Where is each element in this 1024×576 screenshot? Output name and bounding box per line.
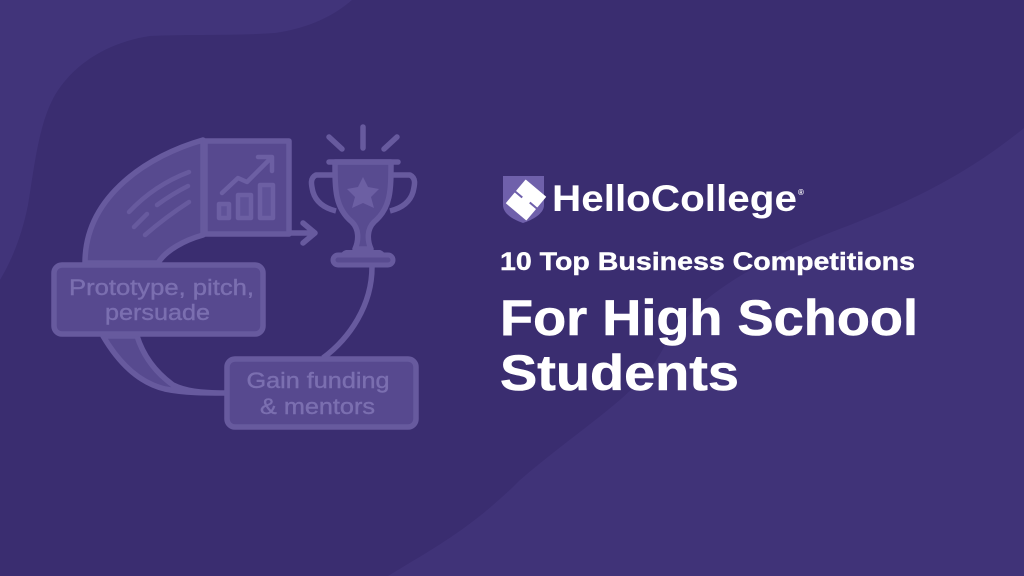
star	[347, 177, 379, 208]
callout: prototype	[54, 265, 263, 334]
growth arrow	[222, 157, 272, 193]
subtitle: 10 Top Business Competitions	[500, 248, 915, 276]
title	[500, 290, 918, 401]
callout: prototype: Prototype, pitch,	[69, 275, 254, 300]
logo: HelloCollege: ®	[798, 188, 804, 197]
title: For High School	[500, 290, 918, 346]
illustration: competition journey	[54, 127, 416, 427]
base	[333, 250, 393, 265]
slide notes	[129, 172, 189, 235]
ribbon path	[85, 140, 225, 393]
callout: prototype: persuade	[105, 300, 210, 325]
callout: funding: Gain funding	[246, 368, 390, 393]
icon: shield	[503, 176, 546, 223]
bars	[219, 185, 273, 218]
callout: funding	[227, 359, 416, 427]
arrow to trophy	[289, 223, 315, 243]
callout: funding: & mentors	[260, 394, 375, 419]
icon: trophy	[311, 127, 415, 265]
connecting line	[323, 267, 372, 358]
wordmark: HelloCollege	[552, 178, 797, 219]
cup	[335, 162, 391, 249]
handles	[311, 175, 415, 211]
sparks	[329, 127, 397, 149]
title: Students	[500, 345, 739, 401]
chart board	[205, 141, 289, 234]
logo: HelloCollege	[503, 176, 804, 223]
